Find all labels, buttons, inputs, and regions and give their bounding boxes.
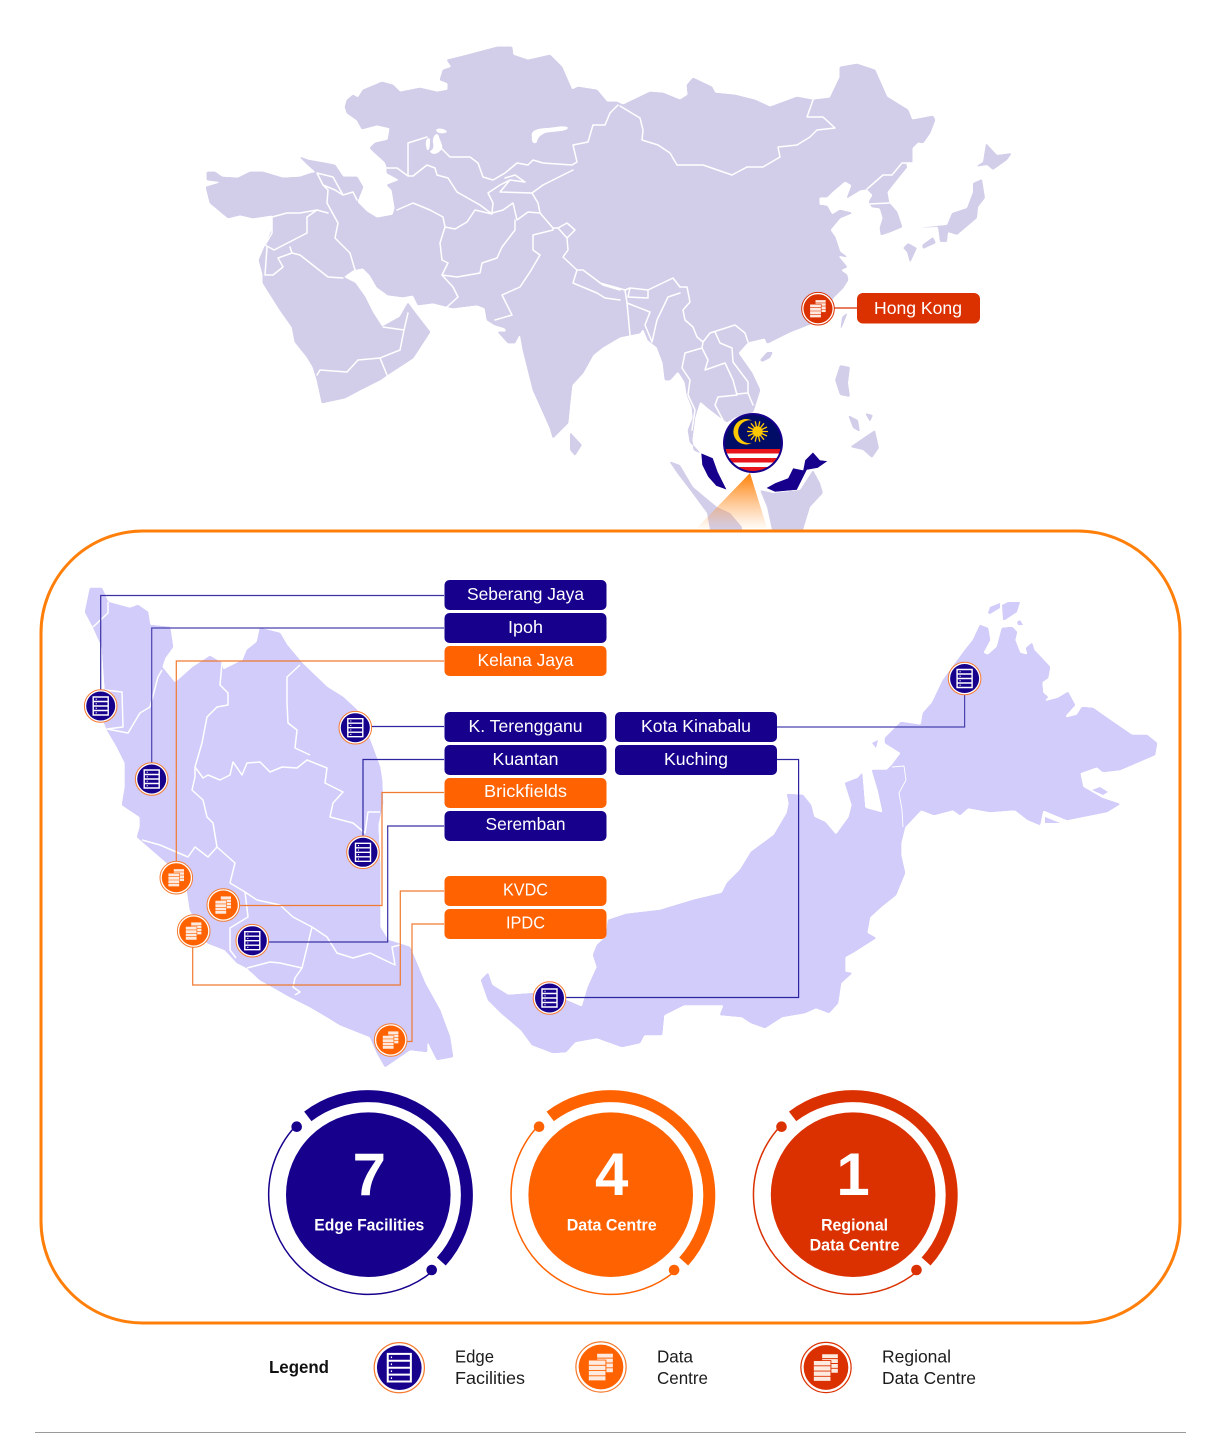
legend: regional data centre: Data Centre — [882, 1368, 976, 1388]
legend: regional data centre: Regional — [882, 1347, 951, 1367]
label: Brickfields — [444, 778, 606, 808]
icon: Malaysia flag — [720, 413, 786, 473]
icon: edge facility Seremban — [236, 924, 269, 957]
legend: regional data centre — [801, 1342, 976, 1393]
label: Seberang Jaya — [444, 580, 606, 610]
stat: 1 Regional Data Centre — [753, 1096, 952, 1294]
legend: edge facilities: Edge — [455, 1347, 494, 1367]
label: IPDC: IPDC — [506, 913, 545, 933]
label: Seberang Jaya: Seberang Jaya — [467, 584, 584, 604]
stat: 1 Regional Data Centre: Regional — [821, 1216, 888, 1235]
lakes — [426, 126, 568, 154]
spotlight cone from flag to panel — [697, 473, 767, 528]
legend: data centre: Centre — [657, 1368, 708, 1388]
stat: 7 Edge Facilities: 7 — [353, 1141, 386, 1208]
legend: edge facilities — [374, 1343, 525, 1393]
label: Kuantan: Kuantan — [492, 749, 558, 769]
legend: data centre — [576, 1342, 708, 1392]
stat: 7 Edge Facilities: Edge Facilities — [314, 1216, 424, 1235]
stat: 1 Regional Data Centre: Data Centre — [810, 1236, 900, 1255]
label: Seremban — [444, 811, 606, 841]
icon: data centre Brickfields — [207, 889, 240, 921]
icon: Hong Kong regional data centre — [802, 292, 834, 325]
Sabah / Sarawak border — [892, 766, 906, 827]
label: Hong Kong — [857, 293, 980, 324]
stat: 4 Data Centre — [511, 1096, 709, 1294]
icon: data centre Kelana Jaya — [160, 861, 193, 894]
icon: data centre IPDC — [374, 1024, 407, 1056]
stat: 7 Edge Facilities — [269, 1096, 467, 1294]
map: Malaysia highlighted in the Asia map — [701, 452, 828, 492]
label: Kelana Jaya — [444, 646, 606, 676]
state borders — [93, 602, 400, 995]
label: Ipoh — [444, 613, 606, 643]
panel: Malaysia facilities — [41, 531, 1180, 1323]
legend: data centre: Data — [657, 1347, 693, 1367]
label: Ipoh: Ipoh — [508, 617, 543, 637]
map: Peninsular Malaysia — [85, 588, 453, 1067]
label: Brickfields: Brickfields — [484, 781, 567, 801]
icon: edge facility Ipoh — [135, 763, 168, 795]
stat: 4 Data Centre: Data Centre — [567, 1216, 657, 1235]
islands — [570, 143, 1012, 530]
label: Seremban: Seremban — [486, 814, 566, 834]
connector: Hong Kong — [834, 307, 858, 309]
stat: 4 Data Centre: 4 — [595, 1141, 629, 1208]
label: IPDC — [444, 909, 606, 939]
map: Asia — [206, 47, 1012, 530]
label: Hong Kong: Hong Kong — [874, 298, 962, 318]
legend heading: Legend — [269, 1357, 329, 1377]
icon: data centre KVDC — [177, 915, 210, 947]
icon: edge facility Seberang Jaya — [84, 690, 117, 722]
label: K. Terengganu — [444, 712, 606, 742]
stat: 1 Regional Data Centre: 1 — [836, 1141, 870, 1208]
icon: edge facility Kuantan — [347, 836, 379, 869]
label: KVDC: KVDC — [503, 880, 548, 900]
label: Kota Kinabalu — [615, 712, 777, 742]
icon: edge facility K. Terengganu — [339, 711, 372, 744]
connectors — [101, 596, 965, 1042]
icon: edge facility Kota Kinabalu — [948, 662, 981, 695]
legend: edge facilities: Facilities — [455, 1368, 525, 1388]
label: Kelana Jaya: Kelana Jaya — [478, 650, 574, 670]
label: Kota Kinabalu: Kota Kinabalu — [641, 716, 751, 736]
label: KVDC — [444, 876, 606, 906]
islands — [872, 602, 1108, 823]
label: Kuching: Kuching — [664, 749, 728, 769]
country borders — [265, 100, 912, 430]
icon: edge facility Kuching — [533, 982, 566, 1014]
label: K. Terengganu: K. Terengganu — [468, 716, 582, 736]
map: East Malaysia — [481, 602, 1157, 1053]
label: Kuching — [615, 745, 777, 775]
label: Kuantan — [444, 745, 606, 775]
